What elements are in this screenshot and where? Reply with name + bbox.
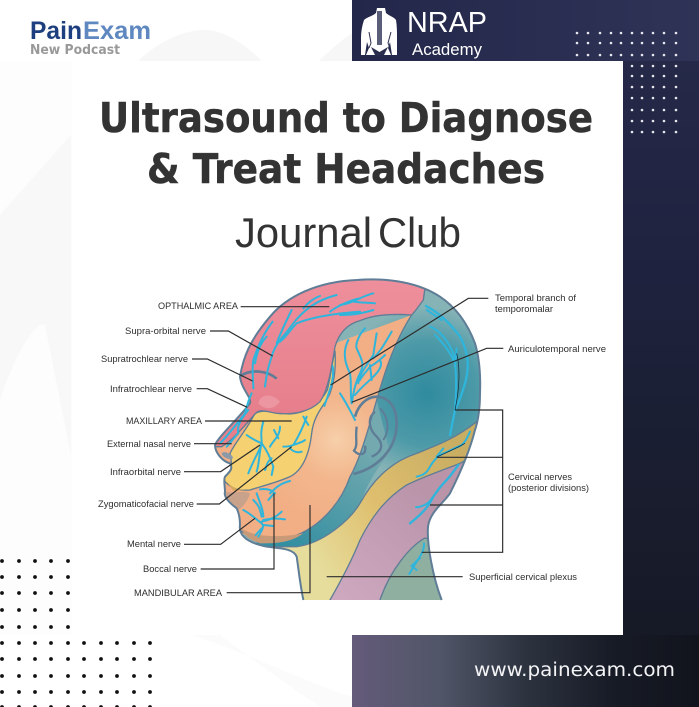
diagram labels: Supratrochlear nerve	[101, 354, 188, 365]
diagram labels: Infratrochlear nerve	[110, 384, 192, 395]
diagram labels: Zygomaticofacial nerve	[98, 499, 194, 510]
logo text: NRAP Academy	[407, 7, 487, 59]
dark background: right column and top band	[352, 0, 699, 707]
nerves	[220, 293, 470, 574]
white main panel	[72, 61, 623, 635]
logo: PainExam New Podcast: New Podcast	[30, 42, 120, 58]
diagram labels: External nasal nerve	[107, 439, 191, 450]
diagram labels: Cervical nerves	[508, 472, 572, 483]
diagram labels: Mental nerve	[127, 539, 181, 550]
logo text: NRAP Academy: Academy	[412, 41, 483, 59]
logo: PainExam New Podcast: Pain	[30, 17, 82, 45]
logo: PainExam New Podcast: Exam	[83, 17, 151, 45]
title: Ultrasound to Diagnose	[99, 94, 593, 142]
subtitle: Journal Club	[235, 209, 461, 256]
diagram labels: Supra-orbital nerve	[125, 326, 206, 337]
skin regions of the head	[216, 280, 480, 600]
diagram labels	[98, 293, 606, 599]
outline, brow and ear	[215, 279, 480, 600]
logo text: NRAP Academy: NRAP	[407, 7, 487, 39]
diagram labels: temporomalar	[495, 304, 553, 315]
title: & Treat Headaches	[147, 145, 545, 193]
title	[99, 94, 593, 193]
leader lines and bracket	[184, 298, 503, 593]
diagram labels: Infraorbital nerve	[110, 467, 181, 478]
icon: NRAP torso with spine	[361, 8, 397, 55]
diagram labels: MAXILLARY AREA	[126, 416, 203, 427]
diagram labels: (posterior divisions)	[508, 483, 589, 494]
subtitle: Journal Club: Club	[378, 209, 461, 256]
website url: www.painexam.com	[474, 660, 675, 681]
decorative dots: bottom left	[0, 559, 152, 707]
footer band	[352, 635, 699, 707]
diagram labels: MANDIBULAR AREA	[134, 588, 223, 599]
chart: head nerve anatomy illustration	[184, 263, 507, 613]
subtitle: Journal Club: Journal	[235, 209, 372, 256]
diagram labels: Auriculotemporal nerve	[508, 344, 606, 355]
decorative dots: top right	[576, 32, 677, 133]
logo: PainExam New Podcast	[30, 17, 151, 58]
diagram labels: OPTHALMIC AREA	[158, 301, 239, 312]
diagram labels: Temporal branch of	[495, 293, 576, 304]
diagram labels: Superficial cervical plexus	[469, 572, 577, 583]
diagram labels: Boccal nerve	[143, 564, 197, 575]
